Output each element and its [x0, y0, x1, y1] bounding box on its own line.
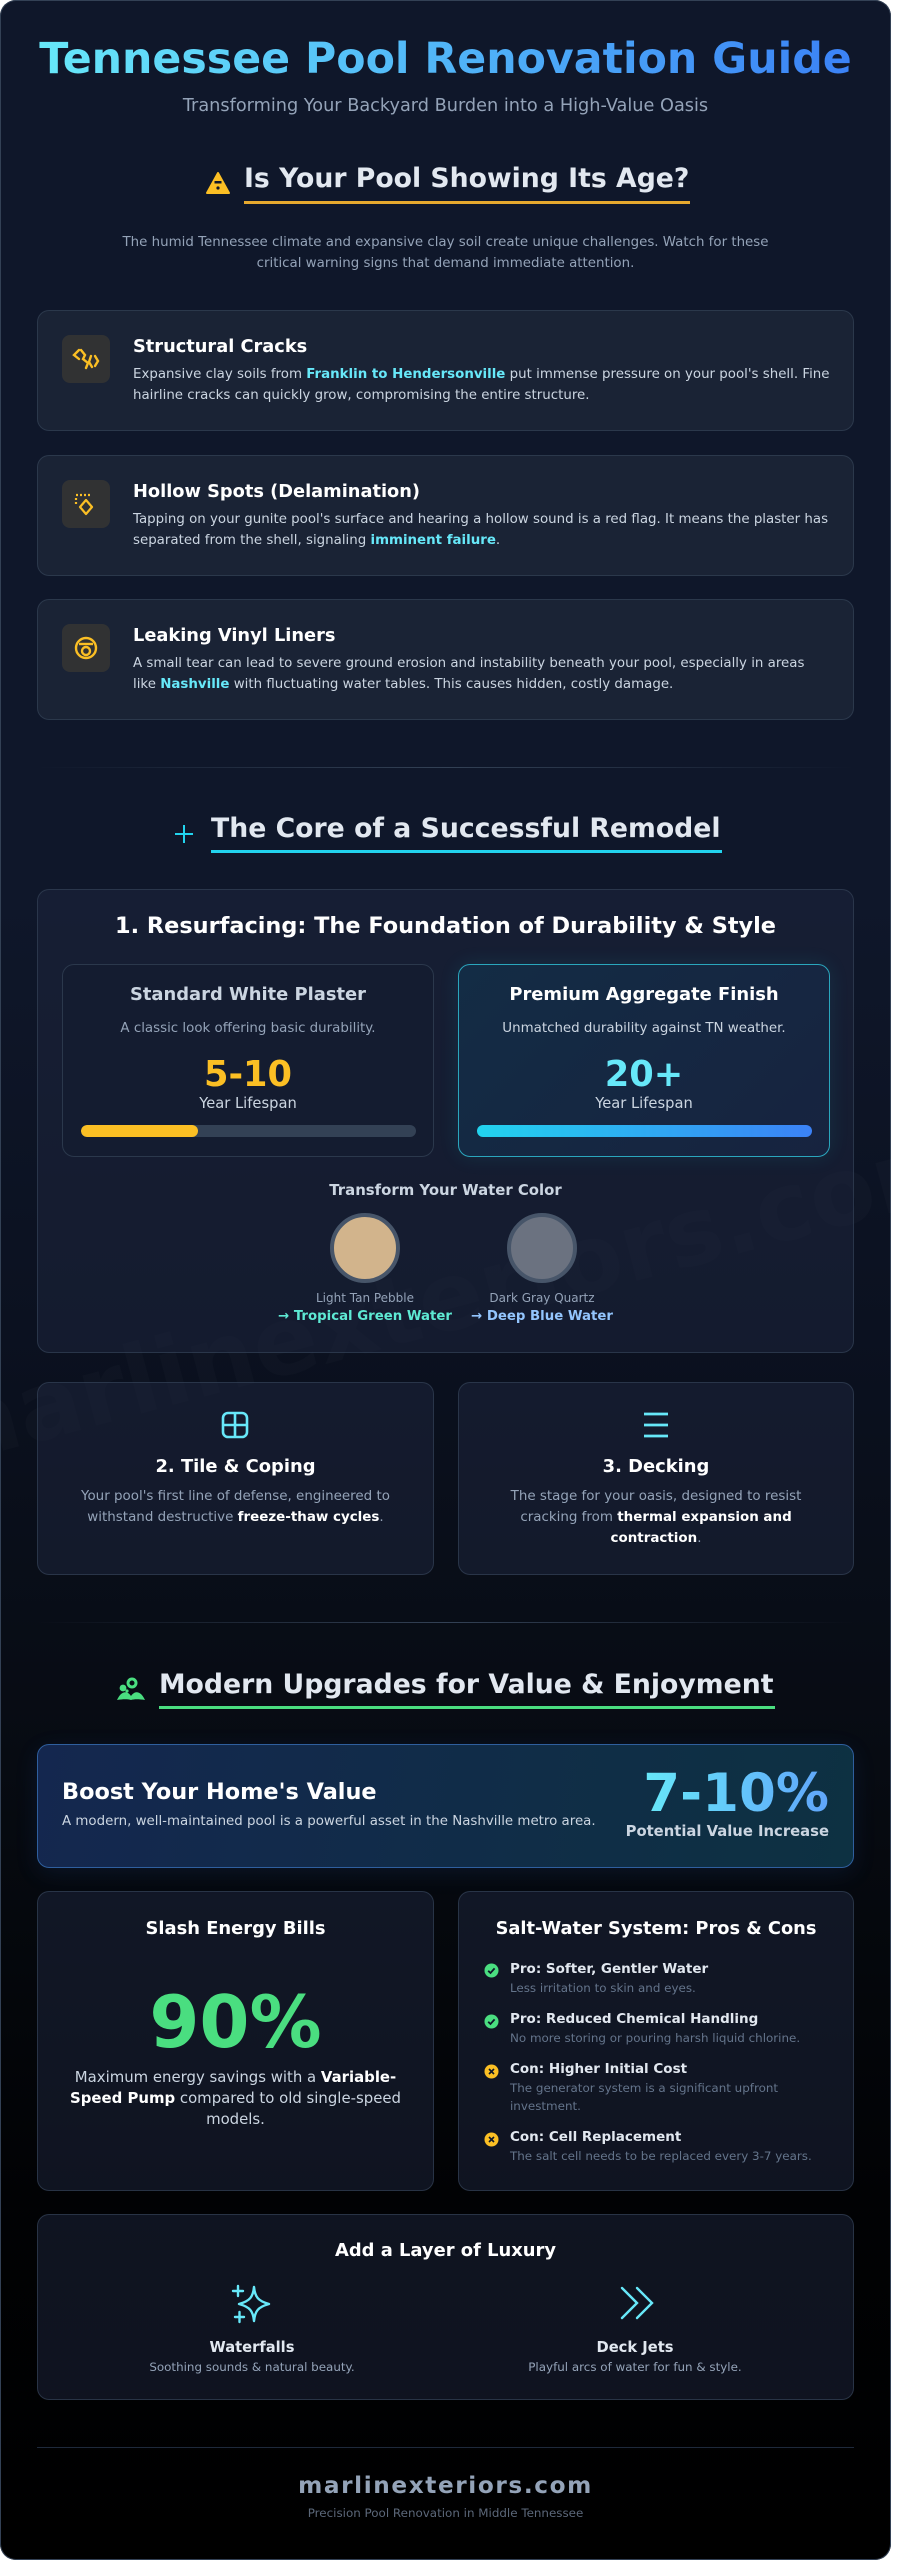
item text: No more storing or pouring harsh liquid chlorine. [510, 2031, 800, 2045]
item text: Less irritation to skin and eyes. [510, 1981, 696, 1995]
icon: plus [175, 825, 193, 843]
item text: investment. [510, 2099, 581, 2113]
heading underline [244, 201, 690, 204]
feature: waterfalls [149, 2284, 355, 2374]
icon: vinyl liner [62, 624, 110, 672]
aggregate lifespan bar [477, 1125, 812, 1137]
card title: 2. Tile & Coping [155, 1456, 316, 1477]
aggregate title: Premium Aggregate Finish [509, 984, 779, 1005]
footer tagline: Precision Pool Renovation in Middle Tennessee [308, 2506, 583, 2520]
plaster lifespan label: Year Lifespan [199, 1095, 297, 1112]
feature title: Deck Jets [597, 2339, 673, 2356]
plaster title: Standard White Plaster [130, 984, 366, 1005]
card text [132, 512, 828, 548]
panel: hollow spots [37, 455, 854, 576]
card text: hairline cracks can quickly grow, compromising the entire structure. [133, 388, 590, 403]
card: premium aggregate [458, 964, 830, 1157]
aggregate lifespan label: Year Lifespan [595, 1095, 693, 1112]
plaster description: A classic look offering basic durability. [120, 1021, 376, 1036]
icon: deck boards [644, 1412, 668, 1438]
heading: modern upgrades [117, 1669, 775, 1709]
card title: Salt-Water System: Pros & Cons [496, 1918, 816, 1939]
check icon [484, 2014, 498, 2028]
card text: Expansive clay soils from Franklin to Hendersonville put immense pressure on your pool's shell. Fine [133, 367, 830, 382]
feature text: Playful arcs of water for fun & style. [528, 2360, 742, 2374]
card text [510, 1489, 802, 1546]
item title: Pro: Softer, Gentler Water [510, 1961, 708, 1977]
con item 2 [484, 2129, 812, 2163]
intro text: The humid Tennessee climate and expansive clay soil create unique challenges. Watch for these [123, 235, 768, 250]
feature title: Waterfalls [210, 2339, 294, 2356]
value label: Potential Value Increase [626, 1823, 829, 1840]
icon: dotted corner and diamond [62, 480, 110, 528]
stat description: models. [206, 2110, 265, 2128]
big stat: 90% [149, 1980, 322, 2064]
intro text [122, 235, 768, 271]
subtitle: Transforming Your Backyard Burden into a High-Value Oasis [183, 96, 708, 116]
card text [133, 367, 830, 403]
swatch: dark gray quartz [471, 1213, 613, 1324]
water color heading: Transform Your Water Color [329, 1181, 562, 1199]
panel: salt-water pros and cons [458, 1891, 854, 2191]
stat description [70, 2068, 401, 2128]
item text: The generator system is a significant upfront [510, 2081, 778, 2095]
card: standard plaster [62, 964, 434, 1157]
panel: resurfacing [37, 889, 854, 1353]
footer [298, 2472, 593, 2520]
x icon [484, 2064, 498, 2078]
card title: Leaking Vinyl Liners [133, 625, 335, 646]
icon: green leaves [117, 1678, 145, 1700]
card text: withstand destructive freeze-thaw cycles. [87, 1510, 384, 1525]
item text [510, 2081, 778, 2113]
icon: warning triangle [206, 172, 230, 194]
panel: home value banner [37, 1744, 854, 1868]
item title: Con: Higher Initial Cost [510, 2061, 687, 2077]
card title: Hollow Spots (Delamination) [133, 481, 420, 502]
card text: Your pool's first line of defense, engineered to [81, 1489, 390, 1504]
heading text: Modern Upgrades for Value & Enjoyment [159, 1669, 773, 1700]
tan caption: Light Tan Pebble [316, 1291, 414, 1305]
stat description: Maximum energy savings with a Variable- [75, 2068, 396, 2086]
card title: Structural Cracks [133, 336, 307, 357]
stat description: Speed Pump compared to old single-speed [70, 2089, 401, 2107]
tan result: → Tropical Green Water [278, 1309, 452, 1324]
gray result: → Deep Blue Water [471, 1309, 613, 1324]
check icon [484, 1964, 498, 1978]
value stat: 7-10% [643, 1763, 829, 1824]
card text: Tapping on your gunite pool's surface and hearing a hollow sound is a red flag. It means the plaster has [133, 512, 828, 527]
item title: Con: Cell Replacement [510, 2129, 681, 2145]
panel: leaking vinyl liners [37, 599, 854, 720]
heading text: Is Your Pool Showing Its Age? [244, 163, 689, 194]
heading underline [211, 850, 722, 853]
footer brand: marlinexteriors.com [298, 2472, 593, 2499]
con item 1 [484, 2061, 778, 2113]
panel title: Add a Layer of Luxury [335, 2240, 556, 2261]
heading underline [159, 1706, 775, 1709]
panel: decking [458, 1382, 854, 1575]
card text [81, 1489, 390, 1525]
icon: tile grid [222, 1412, 248, 1438]
panel: energy bills [37, 1891, 434, 2191]
swatch: light tan pebble [278, 1213, 452, 1324]
x icon [484, 2132, 498, 2146]
gray circle [507, 1213, 577, 1283]
panel heading: 1. Resurfacing: The Foundation of Durability & Style [115, 913, 776, 939]
feature text: Soothing sounds & natural beauty. [149, 2360, 355, 2374]
banner title: Boost Your Home's Value [62, 1779, 377, 1805]
plaster lifespan number: 5-10 [204, 1054, 292, 1095]
card text [133, 656, 804, 692]
card text: cracking from thermal expansion and [520, 1510, 792, 1525]
banner text: A modern, well-maintained pool is a powerful asset in the Nashville metro area. [62, 1814, 596, 1829]
item title: Pro: Reduced Chemical Handling [510, 2011, 758, 2027]
pro item 1 [484, 1961, 708, 1995]
icon: double chevron [620, 2286, 654, 2320]
pro item 2 [484, 2011, 800, 2045]
title: Tennessee Pool Renovation Guide [39, 34, 852, 84]
gray caption: Dark Gray Quartz [489, 1291, 595, 1305]
panel: tile and coping [37, 1382, 434, 1575]
card text: separated from the shell, signaling imminent failure. [133, 533, 500, 548]
tan circle [330, 1213, 400, 1283]
card text: like Nashville with fluctuating water tables. This causes hidden, costly damage. [133, 677, 673, 692]
card title: Slash Energy Bills [146, 1918, 326, 1939]
panel: layer of luxury [37, 2214, 854, 2400]
aggregate description: Unmatched durability against TN weather. [502, 1021, 786, 1036]
intro text: critical warning signs that demand immediate attention. [257, 256, 634, 271]
heading: core remodel [175, 813, 722, 853]
card title: 3. Decking [603, 1456, 709, 1477]
feature: deck jets [528, 2286, 742, 2374]
heading text: The Core of a Successful Remodel [211, 813, 721, 844]
card text: A small tear can lead to severe ground erosion and instability beneath your pool, especially in areas [133, 656, 804, 671]
icon: sparkle [232, 2284, 270, 2324]
plaster lifespan bar [81, 1125, 416, 1137]
heading: pool age [206, 163, 690, 204]
panel: structural cracks [37, 310, 854, 431]
aggregate lifespan number: 20+ [605, 1054, 683, 1095]
card text: contraction. [611, 1531, 701, 1546]
item text: The salt cell needs to be replaced every 3-7 years. [510, 2149, 812, 2163]
card text: The stage for your oasis, designed to resist [511, 1489, 801, 1504]
icon: broken link [62, 335, 110, 383]
